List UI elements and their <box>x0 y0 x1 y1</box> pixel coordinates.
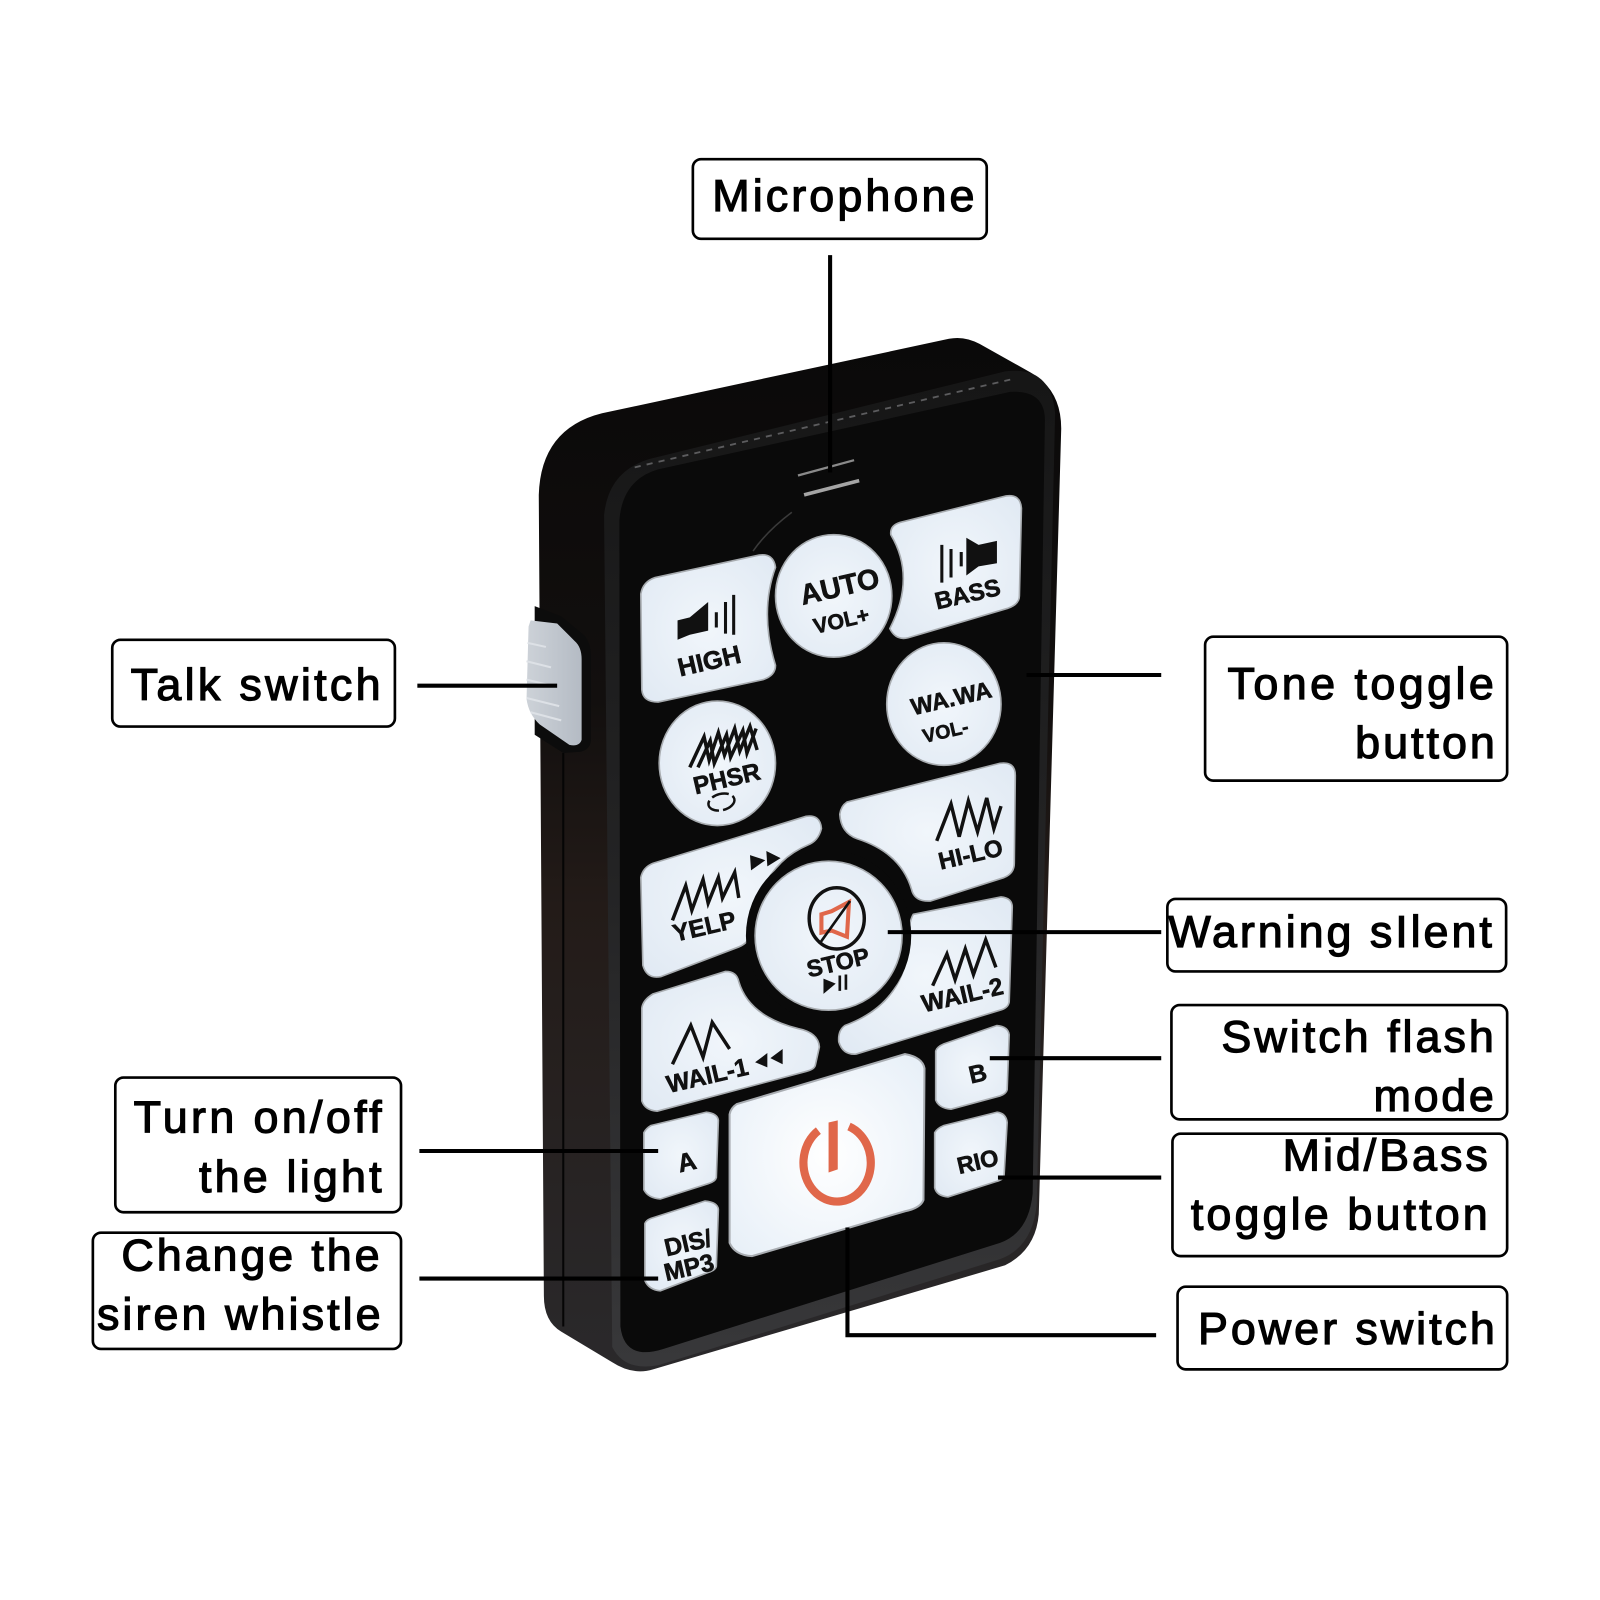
button: A: A <box>675 1147 699 1178</box>
button: BASS <box>890 496 1021 638</box>
button: WA.WA VOL- <box>887 643 1001 765</box>
callout: Mid/Bass toggle button: Mid/Bass <box>1283 1129 1488 1180</box>
leader line: change siren <box>419 1277 658 1281</box>
callout: Tone toggle button: button <box>1355 717 1495 768</box>
callout: Warning sIlent: Warning sIlent <box>1168 906 1492 957</box>
button: HI-LO: HI-LO <box>936 834 1006 875</box>
button: WAIL-2: WAIL-2 <box>919 973 1006 1018</box>
leader line: talk switch <box>417 684 557 688</box>
button: DIS/MP3: MP3 <box>662 1249 717 1287</box>
button: A <box>644 1112 718 1199</box>
button: DIS/MP3: DIS/ <box>662 1225 715 1262</box>
button: power <box>730 1054 924 1256</box>
button: HIGH: HIGH <box>675 641 744 682</box>
device body <box>539 338 1061 1371</box>
callout: Turn on/off the light: the light <box>199 1151 382 1202</box>
leader line: warning silent <box>888 930 1161 934</box>
leader line: microphone <box>828 255 832 472</box>
button: AUTO VOL+: AUTO <box>797 563 883 612</box>
button: B: B <box>966 1059 990 1089</box>
front face panel <box>619 392 1045 1352</box>
callout: Change the siren whistle: siren whistle <box>97 1289 381 1340</box>
top edge highlight <box>635 380 1010 467</box>
button: WAIL-1 <box>642 971 819 1111</box>
callout: Switch flash mode <box>1171 1005 1507 1121</box>
callout: Turn on/off the light: Turn on/off <box>134 1092 382 1143</box>
leader line: switch flash mode <box>990 1056 1161 1060</box>
leader line: mid/bass <box>998 1176 1161 1180</box>
button: WA.WA VOL-: VOL- <box>921 716 971 748</box>
callout: Power switch <box>1178 1287 1507 1369</box>
callout: Talk switch <box>112 640 395 727</box>
leader line: turn on/off light <box>419 1149 658 1153</box>
button: YELP <box>641 816 821 977</box>
talk switch <box>527 606 591 753</box>
callout: Mid/Bass toggle button <box>1172 1129 1507 1256</box>
leader line: tone toggle <box>1027 673 1161 677</box>
button: PHSR <box>659 701 776 826</box>
callout: Switch flash mode: mode <box>1373 1070 1494 1121</box>
button: AUTO VOL+: VOL+ <box>811 603 872 639</box>
button: AUTO VOL+ <box>776 535 892 657</box>
button: STOP: STOP <box>804 943 872 982</box>
button: STOP <box>755 861 902 1010</box>
button: RIO: RIO <box>955 1144 1001 1179</box>
surface scratch <box>753 512 792 551</box>
callout: Power switch: Power switch <box>1198 1303 1495 1354</box>
button: DIS/MP3 <box>645 1201 718 1291</box>
callout: Microphone <box>693 159 987 239</box>
callout: Tone toggle button <box>1205 637 1507 781</box>
callout: Change the siren whistle: Change the <box>121 1229 380 1280</box>
callout: Talk switch: Talk switch <box>131 659 381 710</box>
button: WAIL-1: WAIL-1 <box>664 1054 751 1099</box>
stop button ring <box>746 850 911 1021</box>
callout: Change the siren whistle <box>93 1229 401 1349</box>
button: BASS: BASS <box>932 574 1003 615</box>
callout: Turn on/off the light <box>115 1078 401 1212</box>
button: WAIL-2 <box>839 897 1012 1054</box>
button: HI-LO <box>840 763 1015 901</box>
button: B <box>936 1026 1009 1109</box>
remote control device <box>527 338 1061 1371</box>
button: WA.WA VOL-: WA.WA <box>908 676 994 720</box>
callout: Mid/Bass toggle button: toggle button <box>1191 1189 1488 1240</box>
side seam <box>562 753 564 1327</box>
button: PHSR: PHSR <box>691 759 763 800</box>
front bezel <box>604 371 1055 1367</box>
callout: Microphone: Microphone <box>712 170 974 221</box>
callout: Switch flash mode: Switch flash <box>1221 1011 1494 1062</box>
callout: Tone toggle button: Tone toggle <box>1228 658 1494 709</box>
microphone slits <box>798 460 859 495</box>
leader line: power switch <box>847 1228 1156 1335</box>
callout: Warning sIlent <box>1167 899 1506 971</box>
button: YELP: YELP <box>670 907 739 948</box>
button: HIGH <box>641 555 776 702</box>
button: RIO <box>935 1112 1007 1197</box>
